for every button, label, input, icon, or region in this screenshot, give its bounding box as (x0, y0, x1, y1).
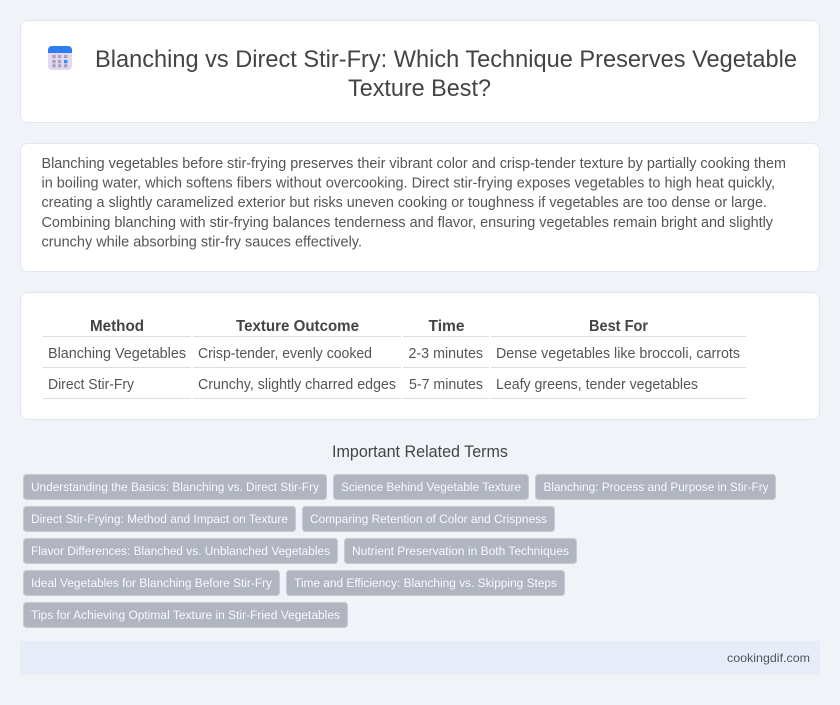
table row: blanching vegetables: Crisp-tender, evenly cooked (198, 346, 372, 362)
tag: time and efficiency: Time and Efficiency: Blanching vs. Skipping Steps (294, 576, 557, 590)
tag: blanching process (536, 474, 776, 500)
table row: blanching vegetables (48, 346, 740, 362)
panel: comparison table card (20, 292, 820, 420)
tag: tips for texture: Tips for Achieving Optimal Texture in Stir-Fried Vegetables (31, 608, 340, 622)
tag: understanding the basics: Understanding the Basics: Blanching vs. Direct Stir-Fry (31, 480, 320, 494)
table header row: Texture Outcome (236, 318, 359, 335)
tag: understanding the basics (24, 474, 326, 500)
tag: science behind texture: Science Behind Vegetable Texture (341, 480, 521, 494)
title (95, 46, 797, 102)
related terms tags (24, 474, 776, 628)
table header row (90, 318, 648, 335)
tag: blanching process: Blanching: Process and Purpose in Stir-Fry (544, 480, 769, 494)
tag: time and efficiency (286, 570, 564, 596)
heading: important related terms: Important Related Terms (332, 443, 508, 461)
footer bar (20, 641, 820, 675)
intro text block: Blanching vegetables before stir-frying preserves their vibrant color and crisp-tender texture by partially cooking them (42, 156, 786, 172)
tag: comparing retention: Comparing Retention of Color and Crispness (310, 512, 547, 526)
title: Blanching vs Direct Stir-Fry: Which Technique Preserves Vegetable (95, 46, 797, 73)
table row: direct stir-fry (48, 377, 698, 393)
panel: title card (20, 20, 820, 122)
table row: blanching vegetables: Dense vegetables like broccoli, carrots (496, 346, 740, 362)
tag: flavor differences (24, 538, 338, 564)
tag: direct stir-frying: Direct Stir-Frying: Method and Impact on Texture (31, 512, 288, 526)
table row: direct stir-fry: Crunchy, slightly charred edges (198, 377, 396, 393)
table header row: Best For (589, 318, 648, 335)
tag: flavor differences: Flavor Differences: Blanched vs. Unblanched Vegetables (31, 544, 330, 558)
intro text block: creating a slightly caramelized exterior but risks uneven cooking or toughness if vegetables are too dense or large. (42, 195, 767, 211)
table row: direct stir-fry: Leafy greens, tender vegetables (496, 377, 698, 393)
panel: intro paragraph card (20, 144, 820, 272)
tag: ideal vegetables (24, 570, 280, 596)
title: Texture Best? (348, 75, 491, 102)
table row: direct stir-fry: 5-7 minutes (409, 377, 483, 393)
tag: ideal vegetables: Ideal Vegetables for Blanching Before Stir-Fry (31, 576, 273, 590)
tag: tips for texture (24, 602, 348, 628)
intro text block (42, 156, 786, 250)
tag: nutrient preservation (344, 538, 576, 564)
table row: blanching vegetables: Blanching Vegetables (48, 346, 186, 362)
icon: calendar (48, 46, 72, 70)
table row: direct stir-fry: Direct Stir-Fry (48, 377, 135, 393)
tag: direct stir-frying (24, 506, 296, 532)
intro text block: crunchy while absorbing stir-fry sauces effectively. (42, 234, 362, 250)
intro text block: in boiling water, which softens fibers without overcooking. Direct stir-frying exposes vegetables to high heat quickly, (42, 176, 775, 192)
footer source text: cookingdif.com (727, 651, 810, 665)
table row: blanching vegetables: 2-3 minutes (408, 346, 483, 362)
tag: science behind texture (334, 474, 528, 500)
intro text block: Combining blanching with stir-frying balances tenderness and flavor, ensuring vegetables remain bright and slightly (42, 215, 774, 231)
table header row: Method (90, 318, 144, 335)
tag: comparing retention (302, 506, 554, 532)
tag: nutrient preservation: Nutrient Preservation in Both Techniques (352, 544, 569, 558)
table header row: Time (428, 318, 465, 335)
